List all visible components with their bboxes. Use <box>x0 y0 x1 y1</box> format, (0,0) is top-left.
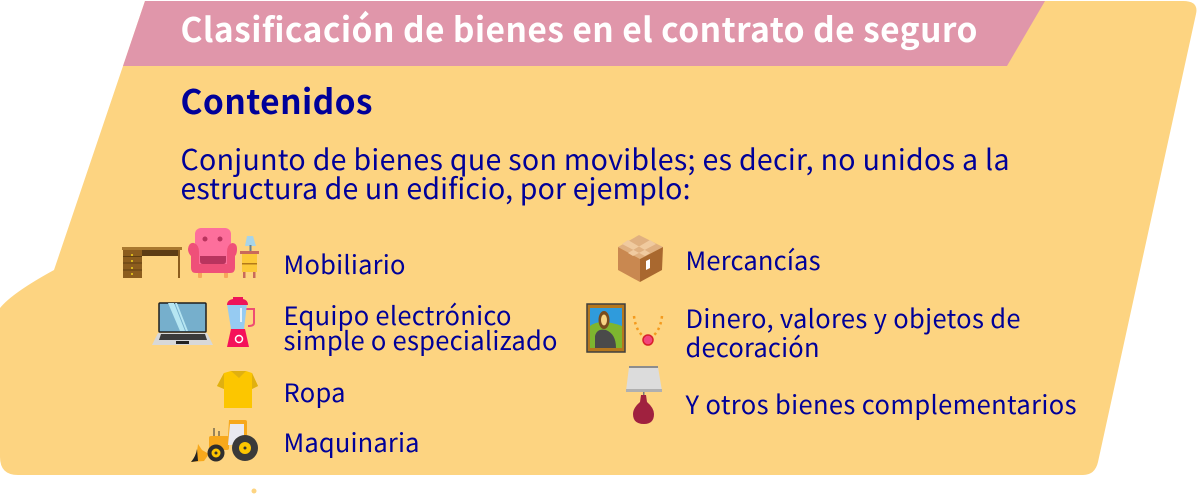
intro text: estructura de un edificio, por ejemplo: <box>180 167 690 208</box>
icon: armchair <box>188 228 237 278</box>
icon: desk <box>122 247 182 278</box>
intro text <box>180 138 1010 208</box>
label: Ropa: Ropa <box>284 373 346 410</box>
label: Y otros bienes complementarios: Y otros bienes complementarios <box>684 385 1076 422</box>
label: Dinero, valores y objetos de decoración: decoración <box>686 328 820 365</box>
label: Mobiliario: Mobiliario <box>284 245 406 282</box>
icon: blender <box>227 297 254 347</box>
label: Dinero, valores y objetos de decoración: Dinero, valores y objetos de <box>686 299 1020 336</box>
icon: decorative dot <box>252 488 256 494</box>
label: Mercancías: Mercancías <box>686 241 820 278</box>
icon: framed painting <box>587 304 625 352</box>
icon: laptop <box>152 303 213 345</box>
intro text: Conjunto de bienes que son movibles; es decir, no unidos a la <box>180 138 1010 179</box>
label: Maquinaria: Maquinaria <box>284 423 420 460</box>
label: Equipo electrónico <box>284 296 558 358</box>
label: Equipo electrónico: Equipo electrónico <box>284 296 512 333</box>
title: Clasificación de bienes en el contrato de seguro <box>180 3 978 52</box>
icon: cardboard box <box>618 235 663 282</box>
title banner <box>123 1 1045 66</box>
heading: Contenidos: Contenidos <box>180 75 372 124</box>
label: Dinero, valores y objetos de decoración <box>686 299 1020 365</box>
label: Equipo electrónico: simple o especializado <box>284 321 558 358</box>
icon: bedside table with lamp <box>240 236 259 278</box>
icon: yellow shirt <box>217 371 258 408</box>
icon: necklace <box>634 316 662 345</box>
icon: table lamp <box>626 366 662 424</box>
icon: bulldozer <box>191 420 258 462</box>
